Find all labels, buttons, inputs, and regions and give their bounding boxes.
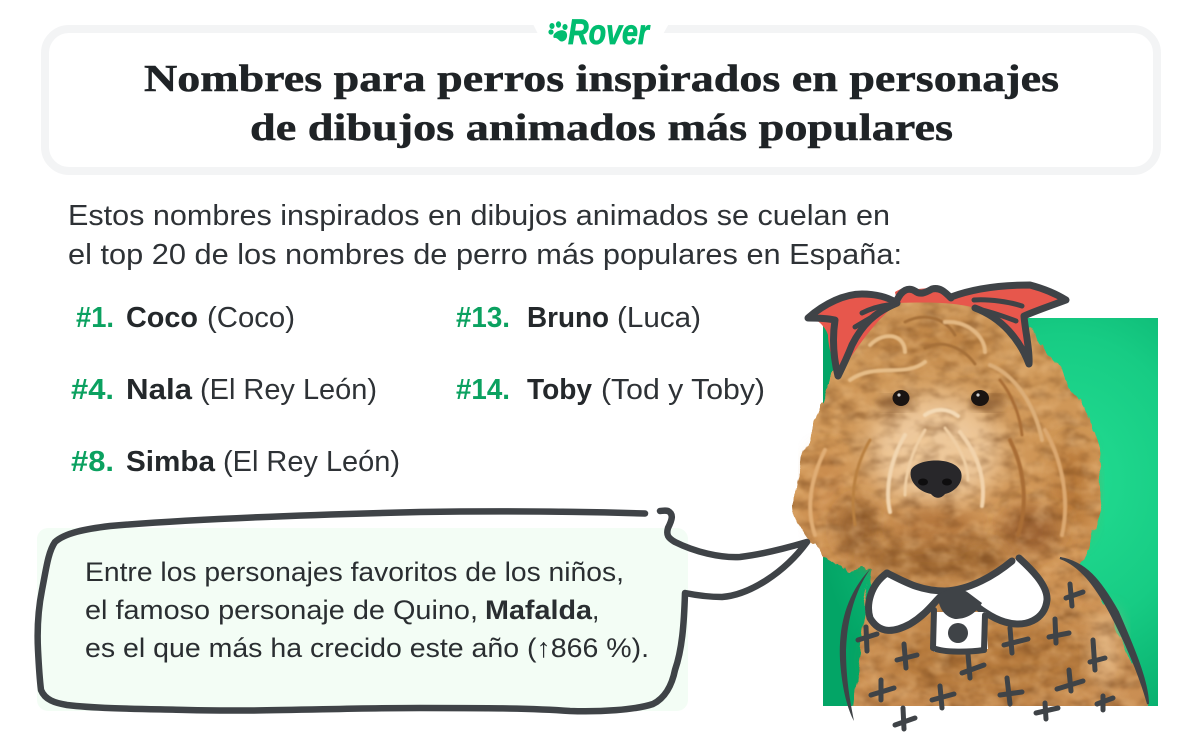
- title: de dibujos animados más populares: [250, 107, 953, 149]
- nose: [911, 460, 962, 498]
- fur texture dark: [793, 295, 1152, 712]
- pluses on cape: [858, 584, 1113, 729]
- panel: callout: [37, 511, 807, 711]
- item: Toby: (Tod y Toby): [601, 374, 765, 406]
- callout text: Entre los personajes favoritos de los niños,: [85, 557, 624, 587]
- cape outline: [840, 558, 1148, 721]
- item: Coco: (Coco): [207, 302, 295, 334]
- text block: intro: el top 20 de los nombres de perro más populares en España:: [68, 239, 902, 271]
- panel: title box: [45, 20, 1157, 171]
- title: [144, 58, 1059, 149]
- item: Toby: [456, 374, 765, 406]
- item: Simba: Simba: [126, 446, 216, 478]
- callout text: Mafalda: [485, 595, 592, 625]
- dog illustration: [793, 285, 1152, 729]
- item: Bruno: Bruno: [527, 302, 609, 334]
- item: Simba: #8.: [71, 446, 114, 478]
- bandana: [808, 285, 1067, 377]
- text block: intro: [68, 200, 902, 271]
- logo: Rover: Rover: [568, 13, 651, 52]
- hair strands: [810, 317, 1065, 535]
- panel: green photo background: [823, 318, 1158, 706]
- item: Nala: Nala: [126, 374, 193, 406]
- item: Simba: [71, 446, 400, 478]
- dog fur: [793, 295, 1152, 712]
- collar knot: [938, 589, 982, 619]
- eye: left: [892, 390, 910, 406]
- list: top names: [71, 302, 765, 478]
- callout text: es el que más ha crecido este año (↑866 %).: [85, 633, 649, 663]
- item: Coco: [76, 302, 295, 334]
- collar: [869, 558, 1047, 652]
- item: Toby: Toby: [527, 374, 592, 406]
- collar tag: [933, 610, 988, 652]
- logo: Rover: [548, 13, 651, 52]
- dog silhouette: [793, 295, 1152, 712]
- eye: right: [971, 390, 989, 406]
- speech bubble outline: [38, 511, 807, 711]
- item: Coco: #1.: [76, 302, 114, 334]
- item: Coco: Coco: [126, 302, 198, 334]
- item: Nala: #4.: [71, 374, 114, 406]
- item: Nala: [71, 374, 377, 406]
- item: Bruno: #13.: [456, 302, 510, 334]
- callout background: [37, 528, 688, 711]
- callout text: [85, 557, 649, 663]
- title: Nombres para perros inspirados en personajes: [144, 58, 1059, 100]
- text block: intro: Estos nombres inspirados en dibujos animados se cuelan en: [68, 200, 890, 232]
- fur texture light: [793, 295, 1152, 712]
- item: Bruno: (Luca): [617, 302, 701, 334]
- item: Simba: (El Rey León): [223, 446, 400, 478]
- item: Nala: (El Rey León): [200, 374, 377, 406]
- item: Bruno: [456, 302, 701, 334]
- item: Toby: #14.: [456, 374, 510, 406]
- eye shadows: [877, 395, 1006, 411]
- soft fur colour regions: [810, 318, 1119, 700]
- callout text: el famoso personaje de Quino,: [85, 595, 478, 625]
- icon: paw: [548, 21, 568, 42]
- callout text: ,: [592, 595, 599, 625]
